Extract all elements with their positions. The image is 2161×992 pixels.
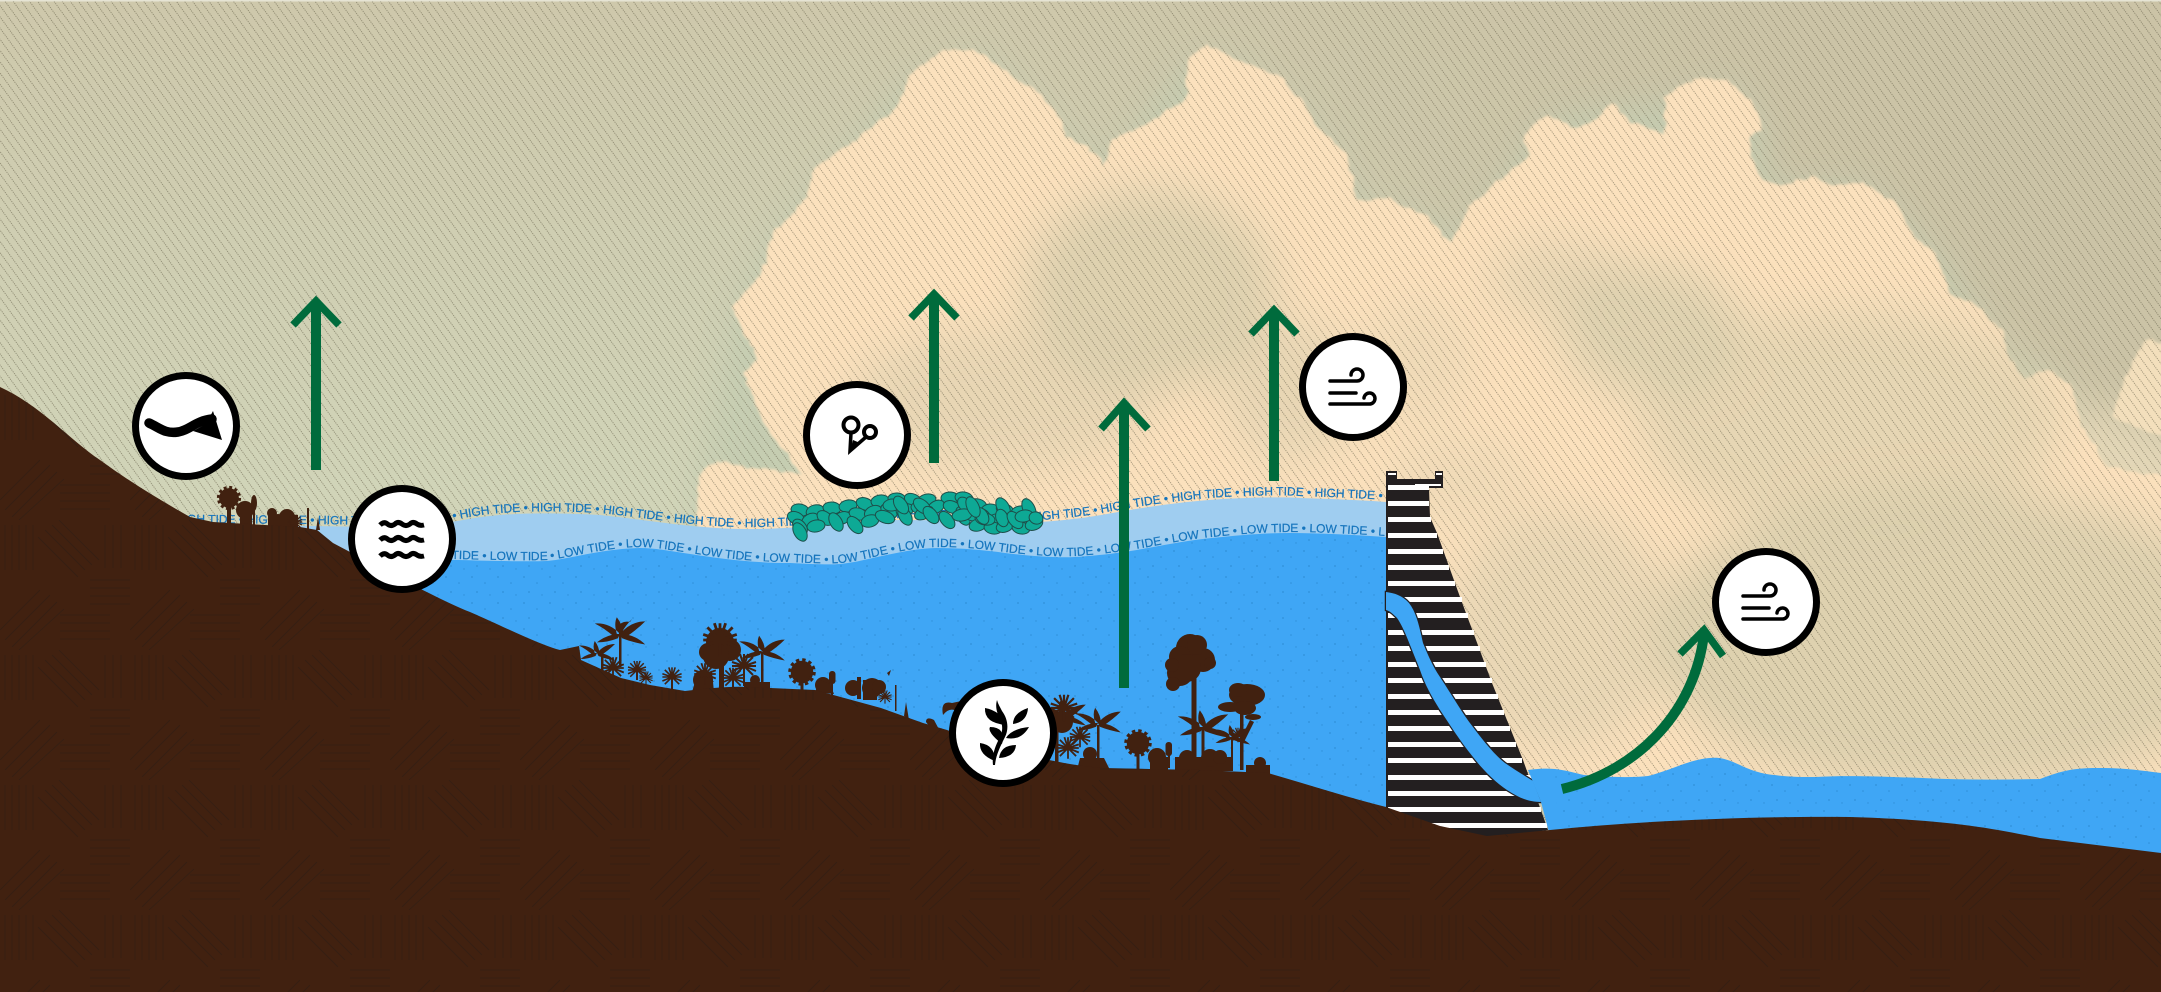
- arrow: evaporation from algae mat: [911, 294, 957, 463]
- icon: algae cells badge: [806, 384, 908, 486]
- spillway channel: [1386, 592, 1541, 802]
- arrow: curved evaporation from spillway to wind: [1562, 630, 1723, 789]
- icon: wind badge over reservoir: [1302, 336, 1404, 438]
- icon: water waves badge: [352, 488, 452, 590]
- dam stripes: [1388, 473, 1547, 828]
- vegetation: shoreline plants: [219, 488, 320, 531]
- terrain cross-section: [0, 387, 2161, 992]
- high tide label curve: HIGH TIDE • HIGH TIDE • HIGH TIDE • HIGH TIDE • HIGH TIDE • HIGH TIDE • HIGH TIDE • HIGH TIDE • HIGH TIDE • HIGH TIDE • HIGH TIDE • HIGH TIDE • HIGH TIDE • HIGH TIDE • HIGH TIDE • HIGH TIDE • HIGH TIDE • HIGH TIDE •: [186, 487, 1382, 528]
- icon: wind badge downstream: [1716, 552, 1816, 652]
- vegetation: lake bed plants left group: [579, 617, 909, 720]
- low tide label curve: LOW TIDE • LOW TIDE • LOW TIDE • LOW TIDE • LOW TIDE • LOW TIDE • LOW TIDE • LOW TIDE • LOW TIDE • LOW TIDE • LOW TIDE • LOW TIDE • LOW TIDE • LOW TIDE • LOW TIDE •: [454, 524, 1384, 564]
- cumulus cloud: [700, 47, 2161, 840]
- arrow: transpiration from lake bed: [1101, 403, 1148, 688]
- icon: plant badge: [952, 682, 1054, 784]
- floating algae / rock mat on water surface: [785, 491, 1045, 544]
- arrow: wind evaporation from reservoir: [1251, 310, 1297, 481]
- arrow: evaporation from shore: [293, 301, 339, 470]
- icon: flow arrow badge: [136, 376, 236, 476]
- reservoir: tidal band between high and low tide: [175, 497, 1386, 700]
- reservoir: water at low tide: [421, 533, 1386, 840]
- dam: [1386, 471, 1548, 840]
- downstream river: [1528, 758, 2161, 870]
- vegetation: lake bed plants right group: [926, 634, 1270, 775]
